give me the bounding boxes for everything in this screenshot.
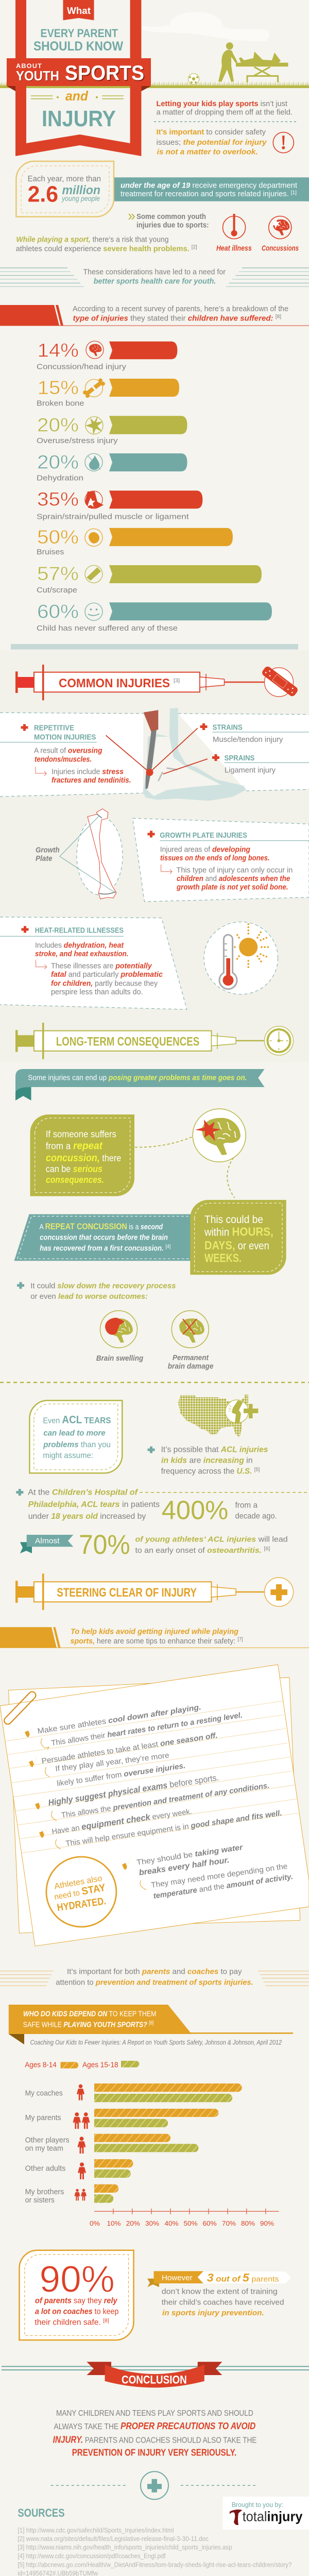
text block with side rules: parents and coaches: attention to prevention and treatment of sports injuries.: [56, 1978, 253, 1987]
tip 5: water breaks: breaks every half hour.: [139, 1856, 230, 1877]
checklist on paper: [0, 1665, 309, 1946]
callout: 2.6 million young people: million: [62, 183, 100, 197]
common injuries lead-in: Some common youth: [136, 212, 206, 221]
bar: 15% broken bone: [37, 377, 179, 408]
panel: growth plate injuries: children and adolescents when the: [177, 874, 290, 883]
title text: INJURY: [42, 106, 116, 131]
tip 2: Persuade athletes to take at least one season off.: [41, 1731, 218, 1766]
x axis: 20%: [126, 2219, 140, 2227]
sources: [2] www.nata.org/sites/default/files/Legislative-release-final-3-30-11.doc: [18, 2535, 209, 2543]
bar: 50% bruises: Bruises: [37, 548, 64, 556]
stat: almost 70%: of young athletes’ ACL injuries will lead: [135, 1535, 288, 1544]
text block with side rules: better sports health care: better sports health care for youth.: [94, 277, 216, 286]
stat: almost 70%: 70%: [79, 1530, 130, 1560]
common injuries lead-in: [129, 212, 209, 230]
tip 3: Highly suggest physical exams before sports.: [47, 1773, 219, 1808]
section heading: steering clear of injury syringe: STEERING CLEAR OF INJURY: [57, 1586, 197, 1600]
sources: [1] http://www.cdc.gov/safechild/Sports_Injuries/index.html: [18, 2527, 174, 2534]
banner ribbon shape: [7, 0, 151, 156]
ribbon and text: 3 out of 5 parents: [147, 2271, 291, 2317]
callout: 90% of parents: [20, 2250, 134, 2340]
callout: hours, days or weeks: DAYS, or even: [204, 1239, 269, 1252]
section heading: long-term consequences syringe: LONG-TERM CONSEQUENCES: [56, 1035, 199, 1048]
callout: 2.6 million young people: [16, 161, 114, 217]
text: slow down recovery: [17, 1282, 176, 1301]
conclusion text: INJURY. PARENTS AND COACHES SHOULD ALSO TAKE THE: [53, 2435, 256, 2445]
row: other adults: [25, 2159, 133, 2179]
chart header: who do kids depend on: SAFE WHILE PLAYING YOUTH SPORTS?: [23, 2020, 165, 2029]
stat: 400% increase: 400%: [162, 1495, 228, 1524]
illustration: growth plate bone: [36, 809, 123, 899]
x axis: 90%: [260, 2219, 274, 2227]
panel: heat-related illnesses: stroke, and heat exhaustion.: [35, 950, 129, 958]
bar: 57% cut/scrape: 57%: [37, 563, 79, 584]
callout: hours, days or weeks: WEEKS.: [204, 1251, 242, 1264]
paperclip: [3, 1690, 37, 1725]
illustration: growth plate bone: Growth: [36, 845, 60, 854]
ribbon: conclusion: CONCLUSION: [122, 2374, 187, 2386]
panel: growth plate injuries: GROWTH PLATE INJURIES: [160, 831, 247, 840]
panel: repetitive motion injuries: fractures and tendinitis.: [52, 776, 131, 785]
section header: survey of parents: According to a recent survey of parents, here’s a breakdown of the: [73, 304, 288, 313]
tip 2: likely to suffer from overuse injuries.: [56, 1761, 186, 1788]
callout: 90% of parents: their children safe.: [35, 2318, 100, 2327]
text block with side rules: parents and coaches: It’s important for both parents and coaches to pay: [67, 1968, 242, 1976]
conclusion text: ALWAYS TAKE THE PROPER PRECAUTIONS TO AVOID: [54, 2421, 255, 2431]
callout: 2.6 million young people: 2.6: [28, 182, 58, 207]
callout: 90% of parents: 90%: [39, 2259, 115, 2300]
chart legend: [25, 2060, 139, 2069]
bar: 35% sprain: Sprain/strain/pulled muscle or ligament: [37, 513, 190, 521]
title text: SPORTS: [65, 62, 144, 84]
x axis: 30%: [145, 2219, 159, 2227]
bar: 20% dehydration: Dehydration: [37, 474, 83, 483]
illustration: thermometer and sun: [204, 922, 278, 994]
title text: [16, 6, 144, 131]
tip 3: This allows the prevention and treatment of any conditions.: [61, 1781, 270, 1820]
tip 4: Have an equipment check every week.: [51, 1806, 193, 1836]
bar chart: injury types: [37, 340, 272, 633]
panel: growth plate injuries: growth plate is not yet solid bone.: [176, 883, 288, 892]
panel: repetitive motion injuries: REPETITIVE: [34, 723, 74, 732]
tip 5: water breaks: [122, 1843, 294, 1901]
x axis: 0%: [90, 2219, 100, 2227]
text: while playing a sport: [16, 235, 197, 253]
icon: concussions: [262, 216, 299, 253]
bar: 20% dehydration: [37, 451, 187, 483]
stamp: stay hydrated: HYDRATED.: [56, 1895, 107, 1913]
stat: almost 70%: [20, 1530, 288, 1560]
callout: repeat concussion consequences: [30, 1114, 134, 1196]
title text: EVERY PARENT: [40, 27, 118, 40]
panel: repetitive motion injuries: [0, 713, 144, 796]
callout: repeat concussion definition: [4]: [165, 1244, 171, 1250]
x axis: 40%: [165, 2219, 179, 2227]
callout: repeat concussion definition: [14, 1214, 193, 1261]
bar: 14% concussion: 14%: [38, 340, 79, 361]
section heading: steering clear of injury syringe: [15, 1573, 294, 1610]
illustration: US map with knee and plus: [178, 1395, 258, 1437]
x axis: 50%: [183, 2219, 198, 2227]
panel: heat-related illnesses: for children, partly because they: [51, 979, 158, 988]
text: while playing a sport: athletes could experience severe health problems.: [16, 244, 192, 253]
teal band: emergency department treatment: under the age of 19 receive emergency department: [121, 181, 297, 190]
stamp: stay hydrated: need to STAY: [53, 1882, 107, 1902]
stamp: stay hydrated: Athletes also: [54, 1874, 103, 1891]
icon: permanent brain damage: brain damage: [168, 1362, 213, 1371]
bar chart: who kids depend on: [25, 2083, 279, 2227]
tip 2: If they play all year, they’re more: [55, 1751, 170, 1773]
x axis: 60%: [203, 2219, 217, 2227]
illustration: growth plate bone: Plate: [36, 854, 52, 863]
text: while playing a sport: While playing a sport, there’s a risk that young: [16, 235, 169, 244]
tip 5: water breaks: They may need more depending on the: [150, 1862, 288, 1890]
callout: hours, days or weeks: This could be: [204, 1214, 263, 1226]
icon: exclamation mark: [273, 132, 294, 153]
section header: survey of parents: type of injuries they stated their children have suffered:: [73, 314, 273, 323]
x axis: [90, 2209, 279, 2227]
stat: 400% increase: under 18 years old increased by: [28, 1512, 146, 1521]
chart legend: Ages 8-14: [25, 2060, 57, 2069]
text block with side rules: better sports health care: These considerations have led to a need for: [83, 268, 226, 277]
sources: [4] http://www.cdc.gov/concussion/pdf/coaches_Engl.pdf: [18, 2552, 166, 2560]
section background: common injuries: [0, 650, 309, 1062]
panel: strains and sprains: Muscle/tendon injury: [213, 735, 283, 744]
section heading: common injuries syringe: COMMON INJURIES: [59, 676, 170, 690]
text: while playing a sport: [2]: [192, 244, 197, 250]
logo panel: brought to you by total injury: totalinjury: [243, 2509, 302, 2524]
text block with side rules: parents and coaches: [0, 1968, 309, 1987]
stat: 400% increase: decade ago.: [235, 1512, 277, 1520]
panel: repetitive motion injuries: Injuries include stress: [52, 767, 124, 776]
callout: 90% of parents: [8]: [103, 2318, 109, 2324]
stat: 400% increase: [16, 1488, 309, 1524]
panel: growth plate injuries: This type of injury can only occur in: [176, 866, 293, 874]
section heading: common injuries syringe: [15, 665, 299, 700]
callout: repeat concussion consequences: If someone suffers: [46, 1129, 116, 1139]
section header: survey of parents: [0, 304, 309, 326]
stat: almost 70%: Almost: [35, 1537, 60, 1546]
row: other players: [25, 2134, 198, 2154]
icon: brain swelling: Brain swelling: [96, 1354, 143, 1363]
section intro: tips for safety: To help kids avoid getting injured while playing: [71, 1628, 238, 1636]
illustration: soccer ball: [188, 74, 199, 84]
panel: strains and sprains: STRAINS: [212, 723, 243, 732]
conclusion text: PREVENTION OF INJURY VERY SERIOUSLY.: [72, 2448, 236, 2458]
icon: teal plus divider: [51, 2471, 256, 2499]
callout: repeat concussion definition: has recovered from a first concussion.: [40, 1245, 177, 1253]
bar: 20% dehydration: 20%: [37, 451, 79, 472]
title text: ABOUT: [16, 63, 42, 70]
panel: heat-related illnesses: These illnesses are potentially: [51, 961, 152, 970]
bar: 15% broken bone: Broken bone: [37, 399, 84, 408]
icon: heat illness: [216, 214, 252, 253]
intro text: letting your kids play sports: [157, 99, 293, 117]
callout: repeat concussion consequences: concussion, there: [46, 1153, 121, 1164]
x axis: 70%: [222, 2219, 236, 2227]
ribbon: greater problems as time goes on: Some injuries can end up posing greater problems as time goes on.: [28, 1074, 247, 1082]
callout: repeat concussion consequences: consequences.: [46, 1175, 104, 1185]
stat: 400% increase: Philadelphia, ACL tears in patients: [28, 1500, 160, 1509]
callout: repeat concussion definition: concussion that occurs before the brain: [40, 1234, 168, 1242]
stat: almost 70%: to an early onset of osteoarthritis.: [135, 1546, 259, 1555]
bar: 20% overuse: Overuse/stress injury: [37, 436, 118, 445]
ribbon: greater problems as time goes on: [15, 1069, 265, 1100]
panel: repetitive motion injuries: A result of overusing: [34, 747, 102, 755]
ribbon and text: 3 out of 5 parents: 3 out of 5 parents: [207, 2271, 279, 2284]
logo panel: brought to you by total injury: [222, 2497, 309, 2530]
section heading: long-term consequences syringe: [15, 1023, 294, 1059]
panel: heat-related illnesses: perspire less than adults do.: [51, 988, 143, 996]
callout: ACL tears: problems than you: [43, 1440, 111, 1449]
panel: heat-related illnesses: fatal and particularly problematic: [51, 970, 163, 979]
tip 2: [29, 1731, 218, 1788]
row: my coaches: My coaches: [25, 2089, 63, 2098]
stat: almost 70%: [6]: [264, 1546, 270, 1552]
stamp: stay hydrated: [46, 1857, 116, 1927]
icon: heat illness: Heat illness: [216, 245, 252, 253]
intro text: letting your kids play sports: a matter of dropping them off at the field.: [157, 108, 293, 117]
check marks and tip 1: This allows their heart rates to return to a resting level.: [50, 1711, 243, 1748]
back sheet: [8, 1677, 300, 1933]
bar: 14% concussion: Concussion/head injury: [37, 363, 127, 371]
decorative and-rules: [31, 96, 124, 99]
ruled lines: [6, 1701, 299, 1853]
illustration: cloud: [142, 12, 269, 41]
text block with side rules: better sports health care: [0, 268, 309, 286]
illustration: grass strip: [0, 81, 309, 88]
conclusion text: MANY CHILDREN AND TEENS PLAY SPORTS AND SHOULD: [56, 2409, 253, 2418]
panel: growth plate injuries: tissues on the ends of long bones.: [160, 854, 270, 862]
row: other players: Other players: [25, 2136, 70, 2144]
section intro: tips for safety: [7]: [237, 1637, 243, 1642]
section intro: tips for safety: [0, 1627, 309, 1648]
bar: 50% bruises: [37, 527, 233, 556]
callout: ACL tears: Even ACL TEARS: [43, 1414, 111, 1426]
chart header: who do kids depend on: [9, 2005, 293, 2046]
text: ACL injuries increasing: [5]: [254, 1467, 260, 1473]
panel: strains and sprains: SPRAINS: [225, 754, 254, 762]
icon: brain swelling: [96, 1311, 143, 1363]
tip 5: water breaks: They should be taking water: [136, 1843, 244, 1867]
callout: 2.6 million young people: Each year, more than: [28, 175, 101, 183]
row: brothers or sisters: My brothers: [25, 2188, 64, 2196]
teal band: emergency department treatment: [1]: [291, 190, 297, 196]
illustration: person pushing stretcher: [218, 42, 288, 82]
x axis: 10%: [107, 2219, 121, 2227]
panel: heat-related illnesses: HEAT-RELATED ILLNESSES: [35, 926, 124, 935]
callout: repeat concussion definition: A REPEAT CONCUSSION is a second: [39, 1222, 163, 1231]
section intro: tips for safety: sports, here are some tips to enhance their safety:: [71, 1637, 243, 1646]
title text: SHOULD KNOW: [33, 40, 124, 54]
row: brothers or sisters: [25, 2184, 118, 2205]
bar: 50% bruises: 50%: [37, 527, 79, 548]
ribbon: conclusion: [87, 2362, 222, 2387]
row: other players: on my team: [25, 2144, 63, 2153]
chart header: who do kids depend on: [8]: [149, 2020, 154, 2026]
ribbon and text: 3 out of 5 parents: However: [162, 2274, 193, 2282]
tip 4: This will help ensure equipment is in good shape and fits well.: [65, 1809, 283, 1848]
ribbon and text: 3 out of 5 parents: their child’s coaches have received: [162, 2298, 284, 2307]
callout: hours, days or weeks: within HOURS,: [204, 1225, 273, 1239]
text: ACL injuries increasing: [147, 1445, 268, 1476]
icon: concussions: Concussions: [262, 245, 299, 253]
bar: 60% never suffered: [37, 601, 272, 633]
callout: ACL tears: can lead to more: [43, 1429, 106, 1438]
sources: [18, 2506, 291, 2576]
callout: hours, days or weeks: [190, 1200, 286, 1275]
sources: [3] http://www.niams.nih.gov/health_info/sports_injuries/child_sports_injuries.asp: [18, 2544, 232, 2551]
bar: 35% sprain: 35%: [37, 489, 79, 510]
chart legend: Ages 15-18: [82, 2060, 118, 2069]
teal band: emergency department treatment: [114, 177, 309, 201]
text: slow down recovery: or even lead to worse outcomes:: [30, 1292, 148, 1301]
intro text: letting your kids play sports: Letting your kids play sports isn’t just: [157, 99, 288, 108]
row: brothers or sisters: or sisters: [25, 2196, 55, 2205]
teal band: emergency department treatment: treatment for recreation and sports related injuries.: [121, 190, 288, 198]
check marks and tip 1: Make sure athletes cool down after playing.: [37, 1703, 202, 1736]
bar: 60% never suffered: 60%: [37, 601, 79, 622]
intro text: important to consider safety: issues; the potential for injury: [157, 138, 267, 147]
text: ACL injuries increasing: frequency across the U.S.: [161, 1467, 253, 1476]
logo panel: brought to you by total injury: Brought to you by:: [232, 2501, 283, 2509]
bar: 35% sprain: [37, 489, 202, 521]
bar: 15% broken bone: 15%: [38, 377, 79, 398]
tip 5: water breaks: temperature and the amount of activity.: [153, 1872, 294, 1901]
panel: strains and sprains: Ligament injury: [225, 766, 276, 774]
bar: 20% overuse: 20%: [37, 414, 79, 435]
callout: 90% of parents: a lot on coaches to keep: [35, 2308, 118, 2316]
callout: 90% of parents: of parents say they rely: [35, 2297, 118, 2306]
intro text: important to consider safety: is not a matter to overlook.: [157, 147, 258, 156]
common injuries lead-in: injuries due to sports:: [136, 221, 209, 230]
section heading: common injuries syringe: [3]: [174, 678, 180, 684]
callout: repeat concussion consequences: can be serious: [46, 1164, 102, 1174]
panel: strains and sprains: [178, 714, 309, 791]
title banner: [7, 0, 151, 156]
sources: SOURCES: [18, 2506, 65, 2519]
connector curves: [135, 1137, 234, 1198]
title text: What: [67, 6, 91, 16]
row: other adults: Other adults: [25, 2164, 65, 2173]
illustration: ankle and foot anatomy: [106, 708, 246, 801]
callout: 2.6 million young people: young people: [61, 194, 100, 202]
bar: 60% never suffered: Child has never suffered any of these: [37, 624, 178, 633]
bar: 20% overuse: [37, 414, 187, 445]
panel: heat-related illnesses: Includes dehydration, heat: [35, 941, 124, 950]
panel: heat-related illnesses: [0, 917, 187, 1009]
conclusion text: [53, 2409, 256, 2458]
stat: 400% increase: At the Children’s Hospital of: [28, 1488, 139, 1497]
panel: growth plate injuries: Injured areas of developing: [160, 845, 250, 854]
row: my coaches: [25, 2083, 242, 2102]
bar: 57% cut/scrape: [37, 563, 262, 595]
intro text: important to consider safety: [157, 128, 267, 156]
callout: ACL tears: might assume:: [43, 1451, 93, 1460]
title text: YOUTH: [16, 68, 59, 83]
icon: permanent brain damage: [168, 1311, 213, 1371]
row: my parents: My parents: [25, 2113, 61, 2122]
bar: 57% cut/scrape: Cut/scrape: [37, 586, 77, 595]
title text: and: [65, 88, 89, 104]
sources: [5] http://abcnews.go.com/Health/w_DietAndFitness/tom-brady-sheds-light-rise-acl-tears-children/story?: [18, 2561, 291, 2568]
callout: ACL tears: [29, 1400, 122, 1473]
icon: permanent brain damage: Permanent: [173, 1353, 209, 1362]
panel: repetitive motion injuries: MOTION INJURIES: [34, 733, 96, 741]
chart header: who do kids depend on: WHO DO KIDS DEPEND ON TO KEEP THEM: [23, 2009, 157, 2018]
x axis: 80%: [241, 2219, 255, 2227]
section header: survey of parents: [8]: [276, 314, 281, 320]
check marks and tip 1: [25, 1703, 243, 1750]
ribbon and text: 3 out of 5 parents: don’t know the extent of training: [162, 2287, 278, 2296]
front sheet: [0, 1665, 309, 1946]
stat: 400% increase: from a: [235, 1501, 258, 1510]
text: ACL injuries increasing: in kids are increasing in: [161, 1456, 253, 1465]
panel: growth plate injuries: [133, 818, 309, 902]
intro text: important to consider safety: It’s important to consider safety: [157, 128, 266, 137]
bar: 14% concussion: [37, 340, 177, 371]
ribbon and text: 3 out of 5 parents: in sports injury prevention.: [162, 2309, 264, 2317]
text: ACL injuries increasing: It’s possible that ACL injuries: [161, 1445, 268, 1454]
panel: repetitive motion injuries: tendons/muscles.: [35, 755, 92, 764]
callout: repeat concussion consequences: from a repeat: [46, 1141, 103, 1152]
text: slow down recovery: It could slow down the recovery process: [30, 1282, 176, 1291]
icon: brain with impact star: [193, 1109, 246, 1162]
row: my parents: [25, 2109, 218, 2129]
